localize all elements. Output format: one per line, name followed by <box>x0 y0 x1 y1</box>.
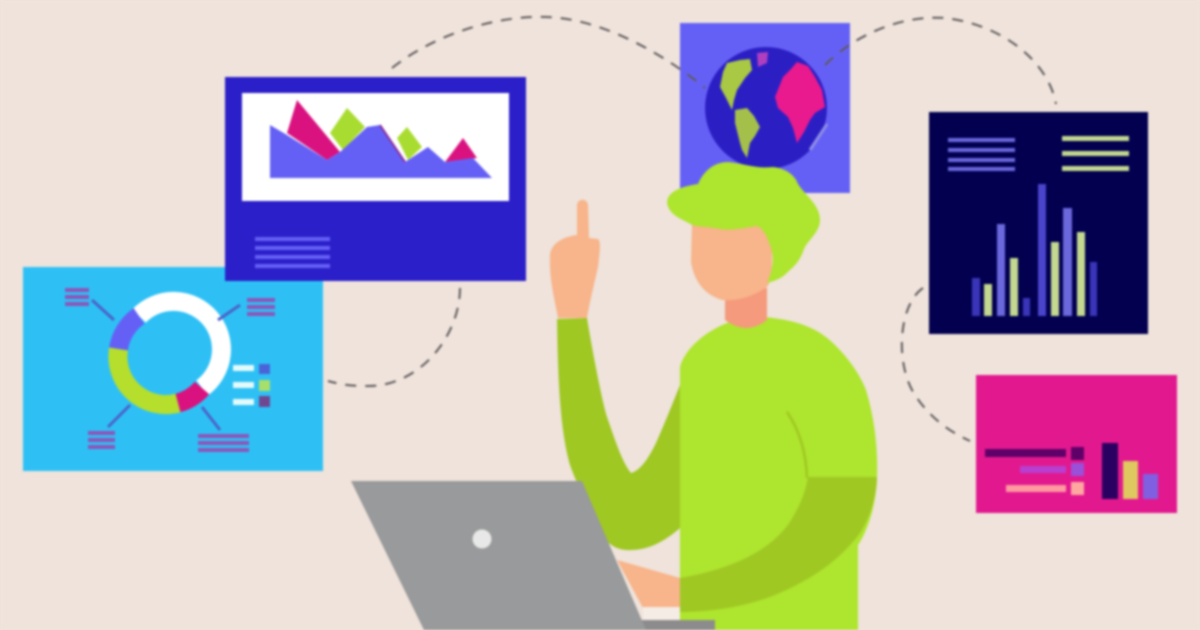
neck <box>725 288 767 328</box>
cuff highlight <box>643 607 680 621</box>
panel: donut chart <box>23 267 323 471</box>
labels <box>65 288 275 452</box>
donut chart <box>118 301 221 405</box>
text lines <box>255 237 330 268</box>
forearm <box>680 477 877 612</box>
lower hand <box>617 560 680 608</box>
leader lines <box>92 300 240 430</box>
arm crease <box>787 412 807 478</box>
text lines <box>948 138 1015 171</box>
dashed connector lines <box>328 17 1056 441</box>
face <box>691 225 772 300</box>
legend <box>233 364 270 407</box>
area chart <box>270 100 492 178</box>
hair <box>667 162 820 283</box>
panel: pink chart <box>976 375 1177 513</box>
icon: globe <box>705 47 827 169</box>
raised arm <box>557 318 680 550</box>
laptop lid <box>351 481 646 630</box>
vertical bars <box>1102 443 1158 499</box>
panel: area chart <box>225 77 526 281</box>
panel: bar chart dark <box>929 112 1148 334</box>
laptop logo <box>472 530 492 548</box>
legend lines <box>1062 136 1129 171</box>
person <box>550 162 877 630</box>
raised hand <box>550 200 600 318</box>
panel: globe <box>680 23 850 193</box>
torso <box>680 317 877 630</box>
bars <box>972 184 1097 316</box>
horizontal bars <box>985 447 1084 495</box>
laptop <box>351 481 715 630</box>
laptop base <box>636 620 715 630</box>
